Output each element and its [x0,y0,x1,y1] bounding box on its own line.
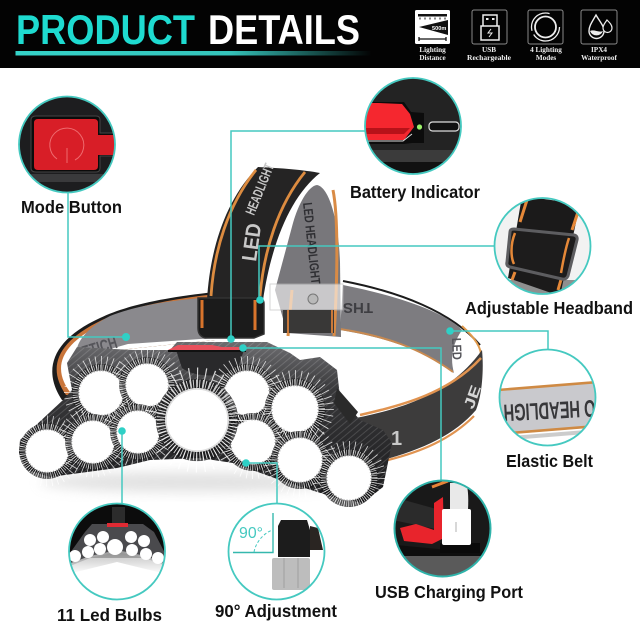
top strap inner side: LED HEADLIGHT [300,202,324,285]
icon: lighting distance: Lighting [419,46,446,54]
outer elastic strap right: 1 [391,428,402,450]
lamp ground shadow [40,472,340,492]
icon: IPX4 waterproof [581,10,618,62]
rear band right [340,281,482,377]
top strap outer side: LED [238,222,266,263]
label: USB charging port: USB Charging Port [375,582,523,602]
panel: battery indicator [350,76,480,202]
icon: 4 lighting modes [528,10,563,62]
headlamp product photo [18,161,485,508]
panel: 90 degree adjustment: 90° [239,525,263,542]
title underline [16,51,372,56]
top strap inner side [275,175,341,337]
label: adjustable headband: Adjustable Headband [465,298,633,318]
icon: lighting distance: Distance [419,54,446,62]
outer elastic strap right [345,350,485,468]
icon: 4 lighting modes: 4 Lighting [530,46,562,54]
panel: elastic belt [498,348,598,471]
red mode button [168,345,246,352]
icon: IPX4 waterproof: Waterproof [581,54,618,62]
callout lines [68,131,548,503]
title [16,6,360,53]
icon: lighting distance [415,10,450,62]
panel: mode button [15,95,122,217]
buckle [198,298,264,338]
rear band right: THS [343,299,373,316]
icon: IPX4 waterproof: IPX4 [591,46,607,54]
panel: adjustable headband [465,196,633,318]
icon: 4 lighting modes: Modes [536,54,556,62]
title: PRODUCT [16,6,195,53]
top strap outer side [207,161,320,300]
top strap outer side: HEADLIGHT [242,161,277,217]
panel: USB charging port [375,479,523,602]
rear band left [52,292,215,400]
icon: USB rechargeable: Rechargeable [467,54,511,62]
rear band left: ETICH [80,333,120,362]
rear band right: LED [449,338,465,360]
clear plastic clip [270,284,343,333]
panel: 90 degree adjustment [215,502,337,621]
icon: USB rechargeable: USB [482,46,496,54]
label: mode button: Mode Button [21,197,122,217]
title: DETAILS [208,6,360,53]
header banner [0,0,640,68]
label: elastic belt: Elastic Belt [506,451,593,471]
panel: 11 LED bulbs [57,502,167,623]
icon: lighting distance: 500m [432,26,446,32]
icon: USB rechargeable [467,10,511,62]
label: 90 degree adjustment: 90° Adjustment [215,601,337,621]
LED bulbs [18,356,379,508]
lamp body [19,342,392,503]
label: battery indicator: Battery Indicator [350,182,480,202]
outer elastic strap right: JE [461,383,485,411]
panel: elastic belt: O HEADLIGH [503,394,596,426]
